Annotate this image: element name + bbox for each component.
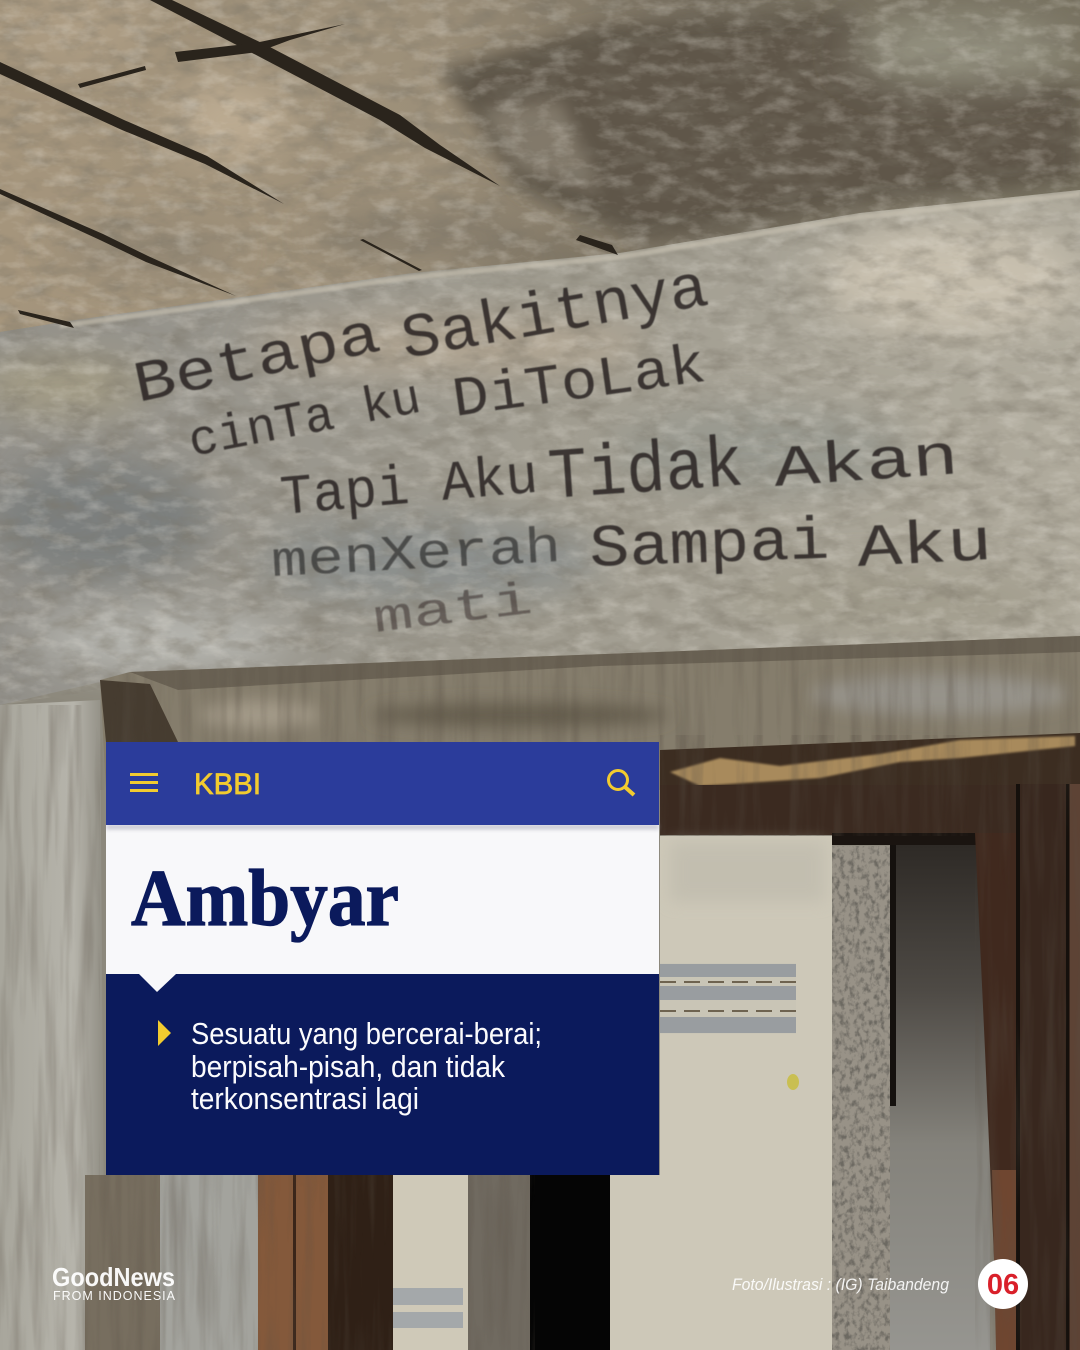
handwriting on the wall: Sampai <box>588 509 831 585</box>
handwriting on the wall: DiToLak <box>448 334 710 433</box>
plaster mottling <box>0 0 1080 720</box>
definition text <box>191 1016 542 1116</box>
panel: KBBI dictionary card <box>106 742 659 1175</box>
wooden door posts <box>975 784 1080 1350</box>
handwriting on the wall: mati <box>370 575 536 646</box>
window opening with vents <box>660 836 832 1350</box>
handwriting on the wall: cinTa ku <box>184 371 426 472</box>
handwriting on the wall: Akan <box>772 426 961 504</box>
door frame <box>660 733 1080 835</box>
handwriting on the wall: Sakitnya <box>396 253 714 377</box>
handwriting on the wall: Tidak <box>546 425 746 520</box>
concrete pillar and grey wall <box>832 833 990 1350</box>
handwriting on the wall: Aku <box>855 510 994 585</box>
bullet arrow <box>158 1020 171 1046</box>
definition panel <box>106 974 659 1175</box>
handwriting on the wall: Betapa <box>128 304 386 420</box>
page number badge <box>978 1259 1028 1309</box>
ceiling cracks <box>0 0 618 328</box>
photo credit: Foto/Ilustrasi : (IG) Taibandeng <box>732 1276 950 1294</box>
wood grain <box>0 705 1080 1350</box>
lower door and wall fragments <box>85 1175 832 1350</box>
wooden lintel <box>100 630 1080 790</box>
heading: Ambyar: Ambyar <box>131 855 399 943</box>
page number badge: 06 <box>987 1269 1019 1301</box>
handwriting on the wall: menXerah <box>270 520 562 592</box>
left wall column <box>0 700 105 1350</box>
handwriting on the wall <box>128 253 994 646</box>
plastered wall beam <box>0 190 1080 705</box>
notch <box>139 974 176 992</box>
ceiling edge highlight <box>60 194 1080 326</box>
logo: GoodNews from Indonesia <box>52 1262 176 1303</box>
icon: menu <box>130 773 158 792</box>
handwriting on the wall: Tapi Aku <box>278 445 540 531</box>
logo: GoodNews from Indonesia: GoodNews <box>52 1262 175 1292</box>
label: KBBI: KBBI <box>194 768 261 801</box>
card header bar <box>106 742 659 825</box>
definition text: berpisah-pisah, dan tidak <box>191 1049 505 1084</box>
definition text: Sesuatu yang bercerai-berai; <box>191 1016 542 1051</box>
card white body <box>106 825 659 975</box>
icon: search <box>608 770 634 795</box>
ceiling slab <box>0 0 1080 332</box>
logo: GoodNews from Indonesia: FROM INDONESIA <box>53 1289 176 1303</box>
definition text: terkonsentrasi lagi <box>191 1081 419 1116</box>
